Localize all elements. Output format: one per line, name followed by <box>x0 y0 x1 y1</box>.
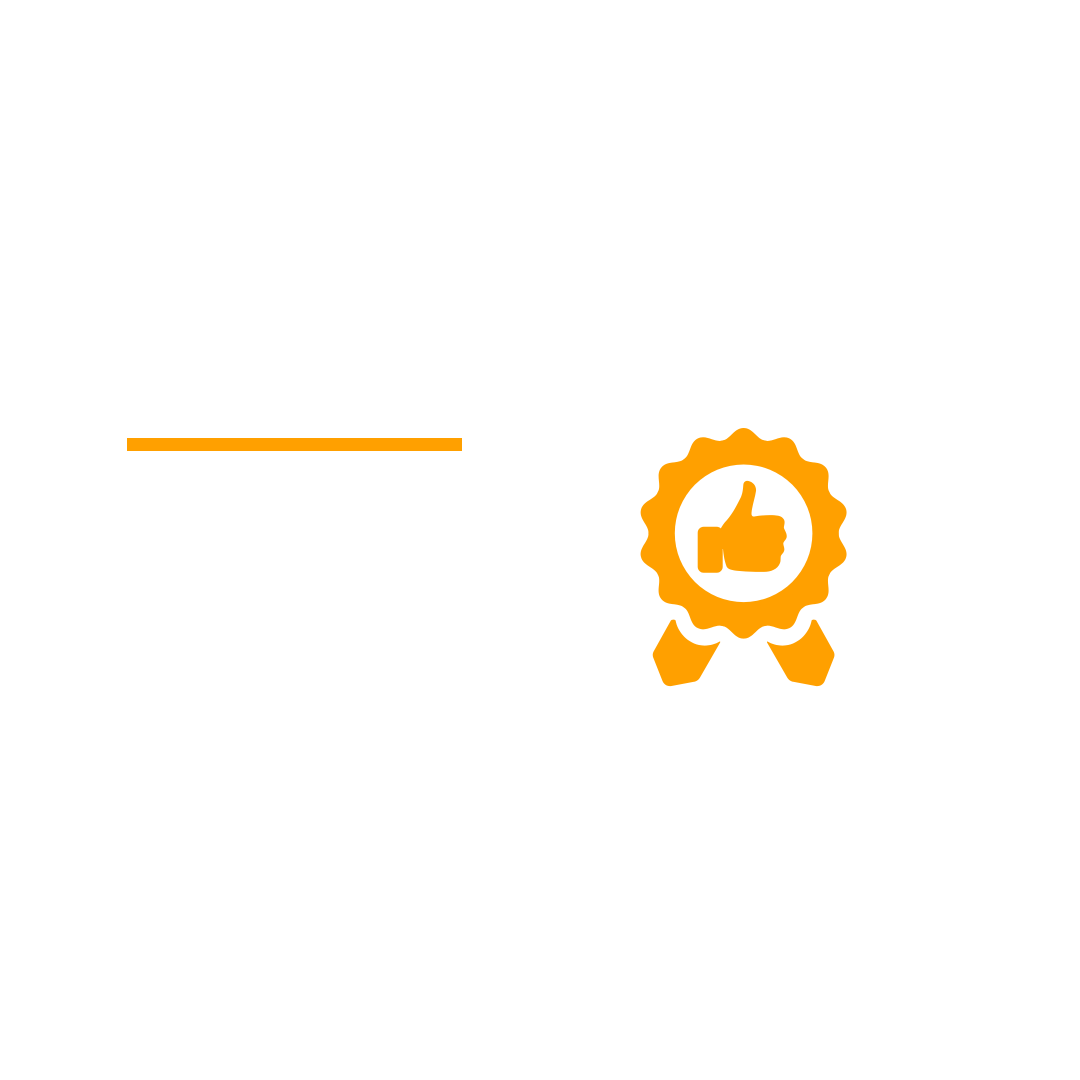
rosette scalloped seal <box>636 428 851 639</box>
orange accent bar <box>127 438 462 451</box>
left ribbon tail <box>653 620 720 686</box>
icon: thumbs up <box>698 481 787 573</box>
right ribbon tail <box>767 620 834 686</box>
